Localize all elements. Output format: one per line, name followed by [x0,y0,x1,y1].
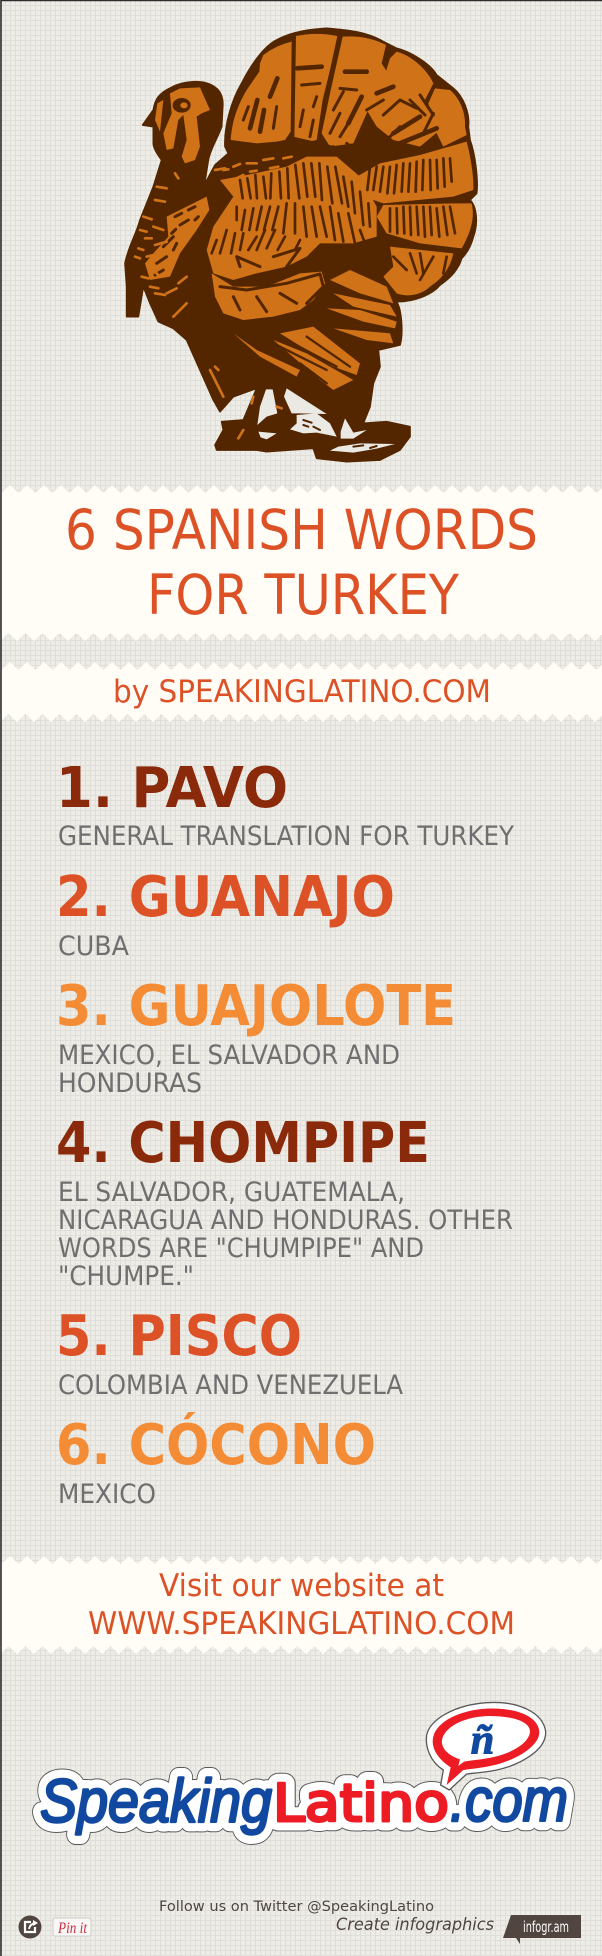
word 2: CUBA [58,931,129,962]
word 4: 4. CHOMPIPE [56,1111,430,1176]
breast speckles [155,207,198,275]
word 5 [56,1304,403,1401]
word 4: WORDS ARE "CHUMPIPE" AND [58,1233,424,1264]
wing lines [220,248,323,312]
byline text: by SPEAKINGLATINO.COM [113,674,491,710]
footer: infogr.am tag [503,1915,581,1944]
logo sticker [40,1766,568,1835]
neck and side flecks [135,157,292,438]
title line 1: 6 SPANISH WORDS [65,498,538,562]
logo outline [40,1766,568,1835]
banner: title [0,485,602,641]
wing [212,272,325,320]
word 1: 1. PAVO [56,756,288,821]
body [207,157,377,280]
speech bubble [426,1702,546,1790]
footer: create infographics: Create infographics [336,1915,494,1934]
word 6: 6. CÓCONO [56,1413,376,1478]
logo text fill: .com [450,1766,568,1834]
leg gaps [257,388,395,453]
logo text fill [40,1766,568,1835]
footer: pin it button: Pin it [57,1920,87,1937]
banner: byline [0,662,602,722]
word 1 [56,756,514,852]
list of words [56,756,514,1510]
breast [145,197,209,280]
word 4: NICARAGUA AND HONDURAS. OTHER [58,1205,513,1236]
footer: infogr.am tag: infogr.am [523,1918,569,1936]
word 4: "CHUMPE." [58,1261,194,1292]
website text line 2: WWW.SPEAKINGLATINO.COM [88,1606,515,1642]
word 5: 5. PISCO [56,1304,302,1369]
letter ñ: ñ [471,1716,494,1763]
word 2: 2. GUANAJO [56,865,395,930]
logo outline: Latino [273,1774,449,1834]
dark feather marks [250,67,437,148]
word 4: EL SALVADOR, GUATEMALA, [58,1177,405,1208]
logo: SpeakingLatino.com [40,1702,568,1835]
logo text fill: Latino [273,1774,449,1834]
title line 2: FOR TURKEY [147,563,459,627]
word 3: MEXICO, EL SALVADOR AND [58,1040,400,1071]
logo sticker: Latino [273,1774,449,1834]
footer: twitter line: Follow us on Twitter @SpeakingLatino [159,1899,434,1915]
word 2 [56,865,395,962]
website text line 1: Visit our website at [159,1568,444,1604]
dark texture lines [212,158,455,280]
fan feathers [145,34,473,390]
footer: share icon [18,1916,42,1938]
logo sticker: .com [450,1766,568,1834]
logo sticker: Speaking [40,1767,272,1835]
word 6 [56,1413,376,1510]
logo text fill: Speaking [40,1767,272,1835]
eye [173,98,191,113]
logo outline: .com [450,1766,568,1834]
word 3: HONDURAS [58,1068,202,1099]
illustration: turkey [125,28,477,462]
banner: website [0,1556,602,1654]
coverts and lower feathers [330,270,393,303]
word 1: GENERAL TRANSLATION FOR TURKEY [58,821,514,852]
word 6: MEXICO [58,1479,156,1510]
word 3: 3. GUAJOLOTE [56,974,456,1039]
word 4 [56,1111,513,1292]
logo outline: Speaking [40,1767,272,1835]
word 5: COLOMBIA AND VENEZUELA [58,1370,403,1401]
lower feather lines [273,337,350,383]
head [155,100,163,132]
word 3 [56,974,456,1099]
foot flecks [303,420,377,448]
